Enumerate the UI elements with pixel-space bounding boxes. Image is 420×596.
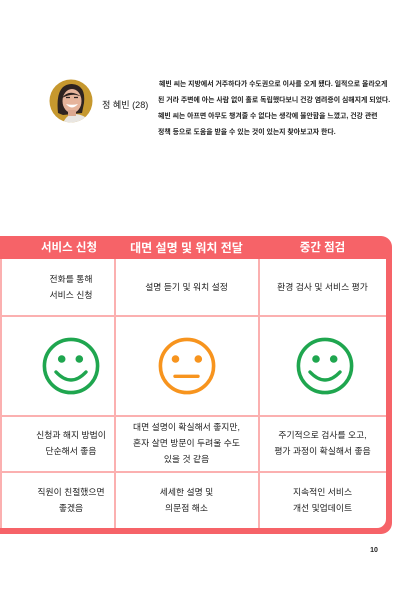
header: in-person explanation: 대면 설명 및 워치 전달 (130, 241, 243, 255)
text: row 4 col 1: 직원이 친절했으면 (37, 487, 105, 497)
text: row 4 col 3: 지속적인 서비스 (293, 487, 352, 497)
intro paragraph: 혜빈 씨는 지방에서 거주하다가 수도권으로 이사를 오게 됐다. 일적으로 올라오게 (159, 80, 387, 88)
text: row 1 col 1: 서비스 신청 (50, 290, 92, 300)
page number: 10 (370, 547, 378, 554)
icon: green smile 1 (42, 338, 100, 394)
text: row 3 col 2 (133, 422, 240, 464)
text: row 1 col 2: 설명 듣기 및 워치 설정 (145, 282, 228, 292)
text: row 4 col 2 (160, 487, 213, 513)
text: row 4 col 2: 세세한 설명 및 (160, 487, 213, 497)
header: service application: 서비스 신청 (41, 242, 97, 254)
text: row 3 col 2: 혼자 살면 방문이 두려울 수도 (133, 438, 240, 448)
text: row 3 col 3: 평가 과정이 확실해서 좋음 (274, 446, 371, 456)
intro paragraph (158, 80, 390, 136)
text: row 3 col 2: 있을 것 같음 (164, 454, 209, 464)
text: row 3 col 1: 신청과 해지 방법이 (36, 430, 106, 440)
text: row 3 col 3: 주기적으로 검사를 오고, (278, 430, 367, 440)
text: row 1 col 1 (50, 274, 92, 300)
intro paragraph: 혜빈 씨는 아프면 아무도 챙겨줄 수 없다는 생각에 불안함을 느꼈고, 건강 관련 (158, 113, 378, 120)
name label: 정 혜빈 (28) (102, 100, 148, 110)
table body (0, 259, 386, 528)
text: row 3 col 2: 대면 설명이 확실해서 좋지만, (133, 422, 240, 432)
table frame (0, 236, 392, 534)
text: row 3 col 1: 단순해서 좋음 (45, 446, 96, 456)
text: row 3 col 1 (36, 430, 106, 456)
portrait photo (50, 80, 92, 122)
intro paragraph: 된 거라 주변에 아는 사람 없이 홀로 독립했다보니 건강 염려증이 심해지게 되었다. (158, 97, 390, 104)
text: row 4 col 1 (37, 487, 105, 513)
text: row 4 col 1: 좋겠음 (59, 503, 83, 513)
header: interim check: 중간 점검 (300, 242, 345, 254)
intro paragraph: 정책 등으로 도움을 받을 수 있는 것이 있는지 찾아보고자 한다. (158, 129, 336, 136)
text: row 3 col 3 (274, 430, 371, 456)
text: row 4 col 3: 개선 및업데이트 (293, 503, 352, 513)
icon: green smile 2 (296, 338, 354, 394)
text: row 4 col 3 (293, 487, 352, 513)
text: row 1 col 1: 전화를 통해 (50, 274, 92, 284)
text: row 4 col 2: 의문점 해소 (165, 503, 208, 513)
grid lines (0, 259, 386, 528)
icon: orange neutral face (158, 338, 216, 394)
text: row 1 col 3: 환경 검사 및 서비스 평가 (277, 282, 368, 292)
